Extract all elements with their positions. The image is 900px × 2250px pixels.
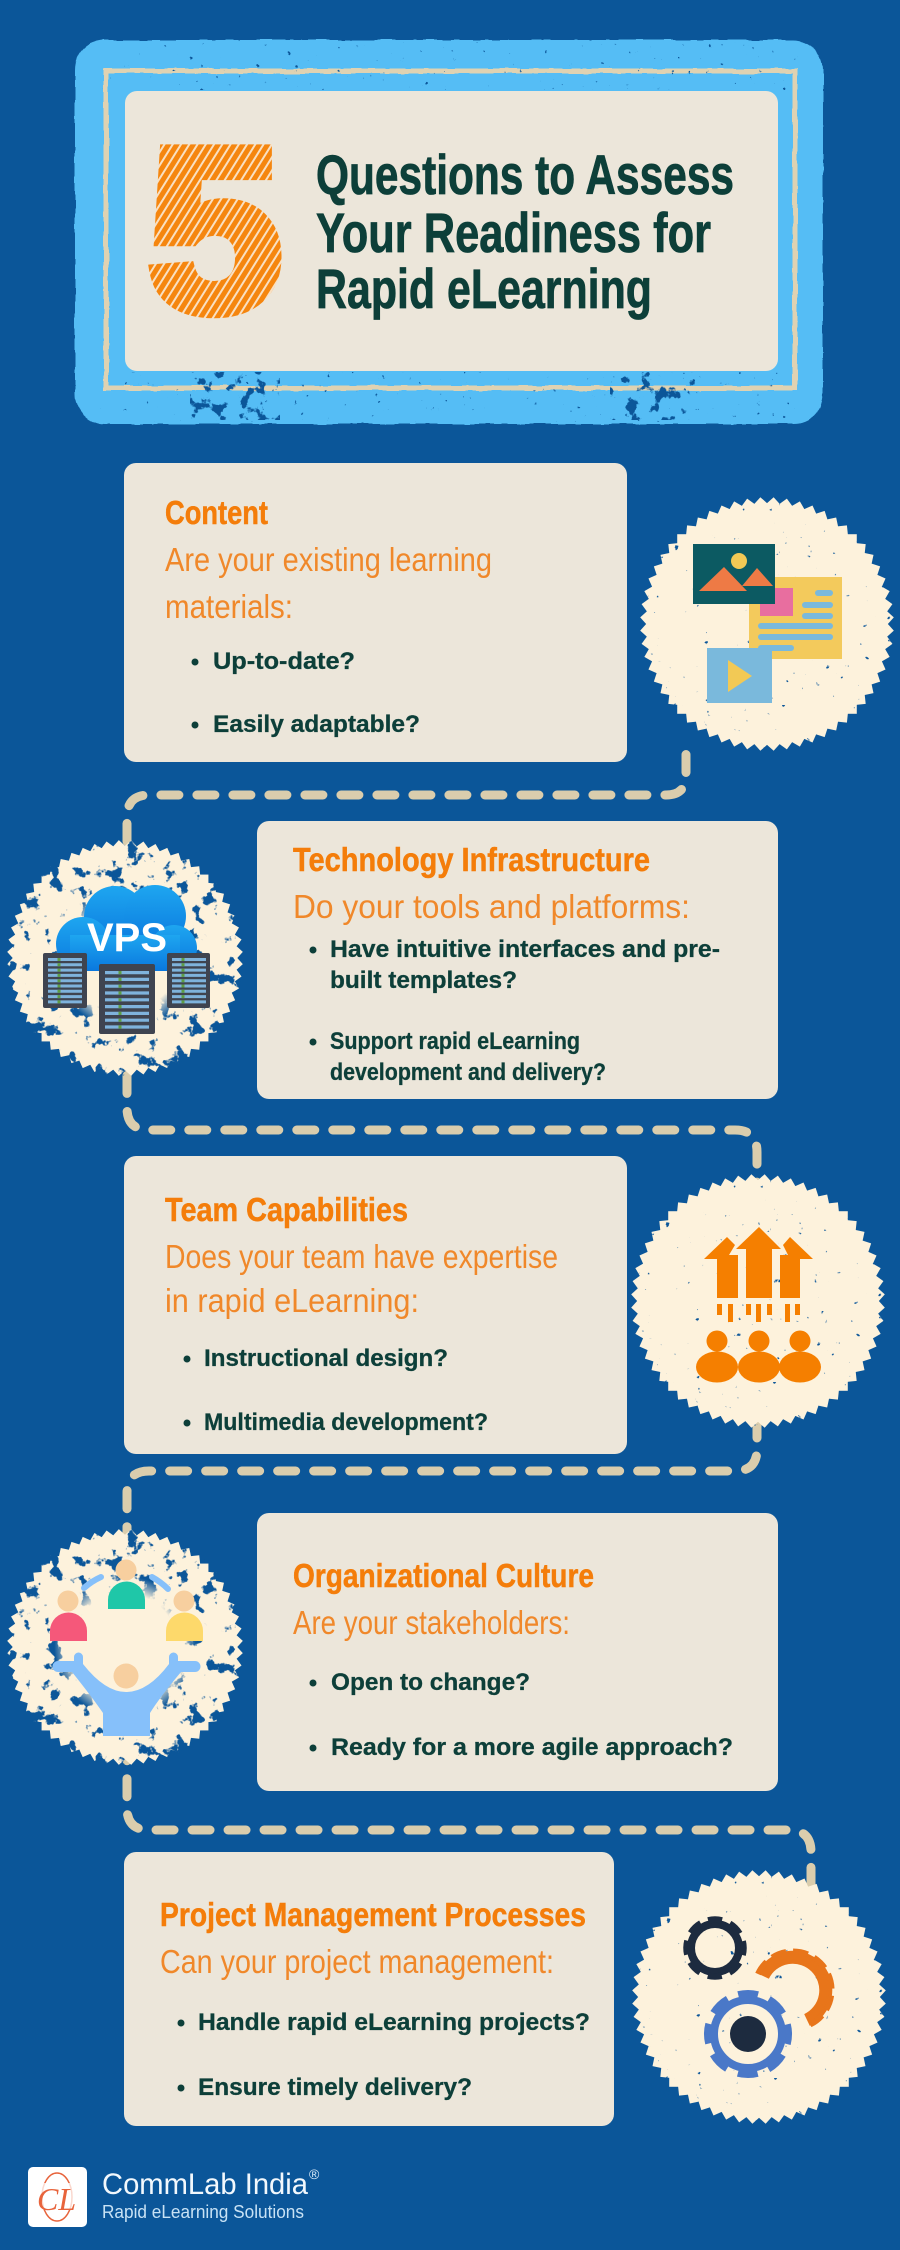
left server rack bbox=[43, 953, 87, 1008]
bullets: content: Easily adaptable? bbox=[213, 711, 420, 738]
left person bbox=[50, 1590, 87, 1641]
video graphic bbox=[707, 648, 772, 703]
hero light blue frame bbox=[75, 40, 823, 424]
hero title card bbox=[125, 91, 778, 371]
registered mark: ® bbox=[309, 2166, 320, 2182]
bullets: team: Multimedia development? bbox=[204, 1409, 488, 1436]
bullets: content bbox=[192, 648, 420, 738]
question: content: materials: bbox=[165, 588, 293, 625]
bullets: culture bbox=[310, 1669, 733, 1761]
icon: rising team arrows badge bbox=[631, 1174, 885, 1428]
three people bbox=[696, 1330, 821, 1382]
bullets: project management: Handle rapid eLearning projects? bbox=[198, 2009, 590, 2036]
right person bbox=[166, 1590, 203, 1641]
question: team: in rapid eLearning: bbox=[165, 1282, 419, 1319]
question: technology: Do your tools and platforms: bbox=[293, 888, 690, 925]
heading: organizational culture: Organizational Culture bbox=[293, 1557, 594, 1594]
bullets: team: Instructional design? bbox=[204, 1345, 448, 1372]
bullets: technology: development and delivery? bbox=[330, 1059, 606, 1086]
center server rack bbox=[99, 964, 155, 1034]
title: Your Readiness for bbox=[316, 201, 711, 264]
question: team: Does your team have expertise bbox=[165, 1238, 558, 1275]
brand tagline: Rapid eLearning Solutions bbox=[102, 2202, 304, 2222]
title bbox=[316, 143, 734, 320]
icon: stakeholders badge bbox=[7, 1529, 243, 1765]
top person bbox=[108, 1560, 145, 1609]
logo mark bbox=[28, 2167, 87, 2227]
panel: project management processes bbox=[124, 1852, 614, 2126]
bullets: culture: Open to change? bbox=[331, 1669, 530, 1696]
bullets: technology: Have intuitive interfaces and pre- bbox=[330, 936, 720, 963]
dark gear bbox=[680, 1913, 750, 1983]
title: Rapid eLearning bbox=[316, 257, 652, 320]
question: team bbox=[165, 1238, 558, 1319]
bottom person with raised arms bbox=[53, 1652, 201, 1736]
hero header panel bbox=[75, 40, 823, 424]
heading: team capabilities: Team Capabilities bbox=[165, 1191, 408, 1228]
icon: gears badge bbox=[632, 1870, 886, 2124]
bullets: culture: Ready for a more agile approach? bbox=[331, 1734, 733, 1761]
curved arrows between people bbox=[84, 1577, 168, 1589]
right server rack bbox=[167, 953, 210, 1008]
dashed connector: content to team capabilities bbox=[127, 754, 757, 1185]
hero grunge specks bbox=[100, 42, 800, 422]
panel: team capabilities bbox=[124, 1156, 627, 1454]
cloud bbox=[56, 885, 197, 971]
bullets: technology bbox=[310, 936, 720, 1086]
footer logo bbox=[28, 2166, 320, 2227]
panel: content bbox=[124, 463, 627, 762]
panel: organizational culture bbox=[257, 1513, 778, 1791]
image graphic bbox=[693, 544, 775, 604]
dashed connector: team capabilities to project management bbox=[127, 1420, 811, 1890]
bullets: team bbox=[184, 1345, 488, 1436]
question: content: Are your existing learning bbox=[165, 541, 492, 578]
blue gear bbox=[699, 1985, 797, 2083]
brand name: CommLab India bbox=[102, 2168, 308, 2201]
question: project management: Can your project management: bbox=[160, 1943, 554, 1980]
logo mark: CL bbox=[37, 2181, 76, 2217]
question: culture: Are your stakeholders: bbox=[293, 1604, 570, 1641]
orange open gear bbox=[758, 1951, 832, 2025]
big number five: 5 bbox=[148, 101, 282, 360]
bullets: technology: built templates? bbox=[330, 967, 517, 994]
bullets: content: Up-to-date? bbox=[213, 648, 355, 675]
heading: content: Content bbox=[165, 494, 268, 531]
arrows bbox=[704, 1227, 813, 1322]
bullets: project management: Ensure timely delivery? bbox=[198, 2074, 472, 2101]
icon: media content badge bbox=[640, 497, 894, 751]
heading: technology infrastructure: Technology Infrastructure bbox=[293, 841, 650, 878]
title: Questions to Assess bbox=[316, 143, 734, 206]
VPS label: VPS bbox=[87, 916, 167, 960]
bullets: project management bbox=[178, 2009, 590, 2101]
document graphic bbox=[749, 577, 842, 659]
heading: project management processes: Project Management Processes bbox=[160, 1896, 586, 1933]
question: content bbox=[165, 541, 492, 625]
icon: VPS cloud servers badge bbox=[7, 840, 243, 1076]
panel: technology infrastructure bbox=[257, 821, 778, 1099]
hero inner tan line bbox=[106, 71, 795, 388]
bullets: technology: Support rapid eLearning bbox=[330, 1028, 580, 1055]
